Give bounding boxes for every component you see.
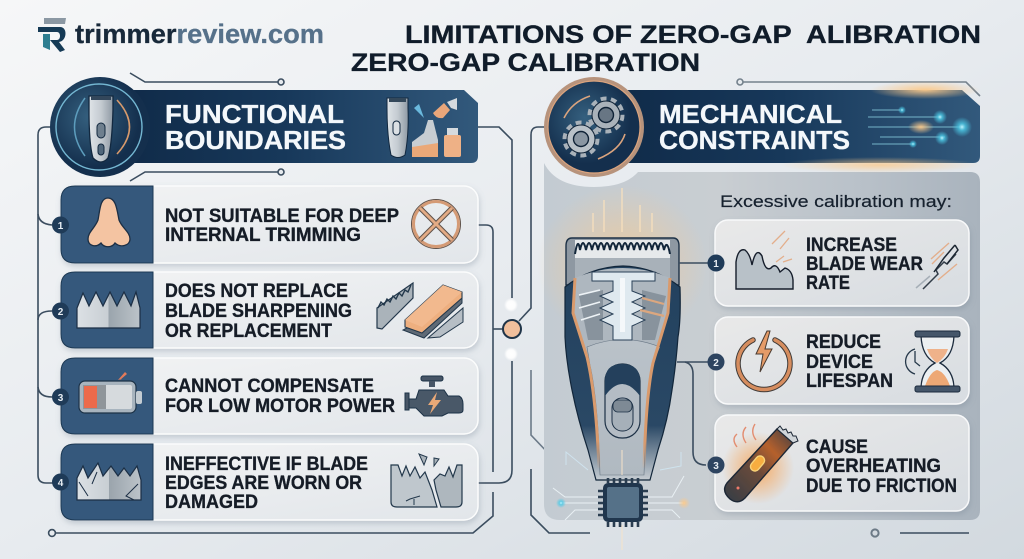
badge 3 xyxy=(52,388,69,406)
panel: functional boundaries xyxy=(50,77,478,520)
icon: damaged blade xyxy=(77,463,141,500)
card 3 xyxy=(61,358,478,434)
title: ZERO-GAP CALIBRATION xyxy=(351,49,700,77)
banner icon: trimmer in circle xyxy=(50,77,150,177)
banner heading: FUNCTIONAL xyxy=(165,99,344,129)
banner heading: BOUNDARIES xyxy=(165,125,346,155)
card text: LIFESPAN xyxy=(806,371,893,392)
card text: RATE xyxy=(806,273,850,294)
card 4 text: INEFFECTIVE IF BLADE xyxy=(165,454,368,475)
card text: DEVICE xyxy=(806,352,873,373)
card 2 xyxy=(61,272,478,348)
icon: engine with bolt xyxy=(405,376,463,416)
banner: mechanical constraints xyxy=(544,77,980,177)
banner heading xyxy=(659,99,850,155)
icon: crossed circle xyxy=(412,200,460,248)
card 3 text: FOR LOW MOTOR POWER xyxy=(165,396,395,417)
icon: blade teeth xyxy=(77,292,140,328)
card 2 text: BLADE SHARPENING xyxy=(165,301,352,322)
icon: comb and whetstone xyxy=(377,283,463,338)
card 1 text xyxy=(165,206,399,246)
badge 1 xyxy=(708,254,724,272)
card 3 text xyxy=(165,376,395,417)
banner heading: MECHANICAL xyxy=(659,99,842,129)
card: blade wear xyxy=(715,220,969,306)
icon: cracked blade xyxy=(391,454,462,507)
card text: OVERHEATING xyxy=(806,456,941,477)
badge 2 xyxy=(708,354,724,370)
icon: overheating trimmer xyxy=(722,424,798,504)
circuit connector lines xyxy=(38,73,980,537)
banner: functional boundaries xyxy=(50,77,478,177)
icon: worn blade xyxy=(736,231,793,289)
badge 2: 2 xyxy=(713,358,719,369)
logo mark xyxy=(38,18,66,52)
card text: BLADE WEAR xyxy=(806,254,923,275)
icon: low battery xyxy=(79,372,142,413)
badge 3: 3 xyxy=(713,461,719,472)
trimmer head inner xyxy=(573,268,670,475)
badge 3 xyxy=(708,456,724,474)
banner icon: gears in circle xyxy=(544,77,644,177)
badge 4 xyxy=(52,474,69,490)
card 4 text xyxy=(165,454,368,513)
card 2 text: OR REPLACEMENT xyxy=(165,321,332,342)
logo wordmark: trimmerreview.com xyxy=(75,19,324,49)
number badges right xyxy=(708,254,724,474)
icon: power bolt xyxy=(738,331,790,390)
badge 3: 3 xyxy=(58,393,64,404)
card text: INCREASE xyxy=(806,235,897,256)
central junction node xyxy=(503,298,521,361)
icon: worn tool xyxy=(916,243,958,289)
card 4 text: EDGES ARE WORN OR xyxy=(165,473,362,494)
card text: CAUSE xyxy=(806,437,868,458)
card 1 xyxy=(61,186,478,263)
banner heading: CONSTRAINTS xyxy=(659,125,850,155)
card text: DUE TO FRICTION xyxy=(806,476,957,497)
logo xyxy=(38,18,324,52)
badge 1: 1 xyxy=(713,259,719,270)
card text xyxy=(806,437,957,497)
card text xyxy=(806,332,893,392)
large trimmer illustration xyxy=(537,185,707,480)
card 1 text: NOT SUITABLE FOR DEEP xyxy=(165,206,399,227)
trimmer dark side shell xyxy=(565,266,680,480)
card 2 text xyxy=(165,281,352,342)
banner heading xyxy=(165,99,346,155)
right card connectors xyxy=(677,263,708,465)
banner icon: trimmer and products xyxy=(387,98,461,158)
grey panel background xyxy=(544,163,980,520)
title xyxy=(351,21,981,77)
badge 2 xyxy=(52,302,69,320)
title: LIMITATIONS OF ZERO-GAP ALIBRATION xyxy=(405,21,981,49)
badge 1 xyxy=(52,216,69,234)
icon: hourglass xyxy=(906,331,960,392)
card text xyxy=(806,235,923,294)
card 4 text: DAMAGED xyxy=(165,492,258,513)
card text: REDUCE xyxy=(806,332,881,353)
subheading: Excessive calibration may: xyxy=(720,192,952,211)
card 1 text: INTERNAL TRIMMING xyxy=(165,225,361,246)
microchip xyxy=(553,450,690,550)
badge 2: 2 xyxy=(58,307,64,318)
card: overheating xyxy=(715,415,969,511)
card 4 xyxy=(61,444,478,520)
badge 1: 1 xyxy=(58,221,64,232)
panel: mechanical constraints xyxy=(537,77,980,550)
card: device lifespan xyxy=(715,317,969,404)
number badges left xyxy=(52,216,69,490)
badge 4: 4 xyxy=(58,478,64,489)
card 2 text: DOES NOT REPLACE xyxy=(165,281,348,302)
icon: nose xyxy=(88,198,130,247)
banner light streaks xyxy=(868,106,972,148)
card 3 text: CANNOT COMPENSATE xyxy=(165,376,374,397)
